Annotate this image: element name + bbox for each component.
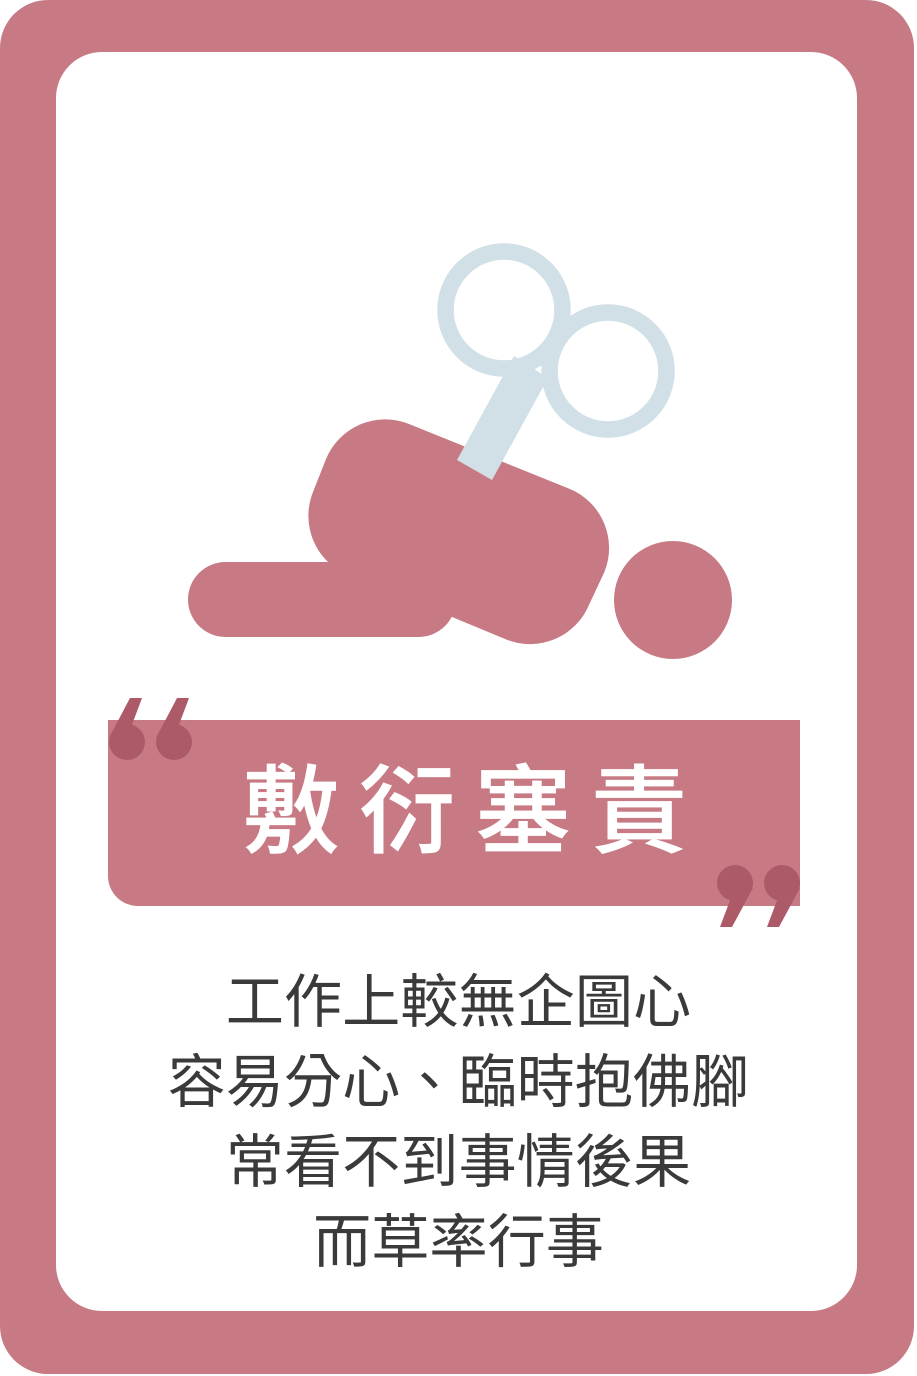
icon: opening quote mark bbox=[109, 698, 192, 760]
description text: 工作上較無企圖心 bbox=[226, 970, 691, 1035]
description text: 常看不到事情後果 bbox=[226, 1130, 691, 1195]
inner white panel bbox=[56, 52, 857, 1311]
description text bbox=[168, 970, 749, 1275]
description text: 而草率行事 bbox=[313, 1210, 604, 1275]
key bbox=[446, 252, 666, 480]
heading text: 敷衍塞責 bbox=[243, 759, 707, 866]
head bbox=[614, 541, 732, 659]
icon: closing quote mark bbox=[717, 865, 800, 927]
heading banner bbox=[108, 720, 800, 906]
body bbox=[308, 419, 609, 644]
icon: person with wind-up key on back bbox=[188, 243, 732, 659]
description text: 容易分心、臨時抱佛腳 bbox=[168, 1050, 749, 1115]
arm bbox=[188, 562, 456, 637]
